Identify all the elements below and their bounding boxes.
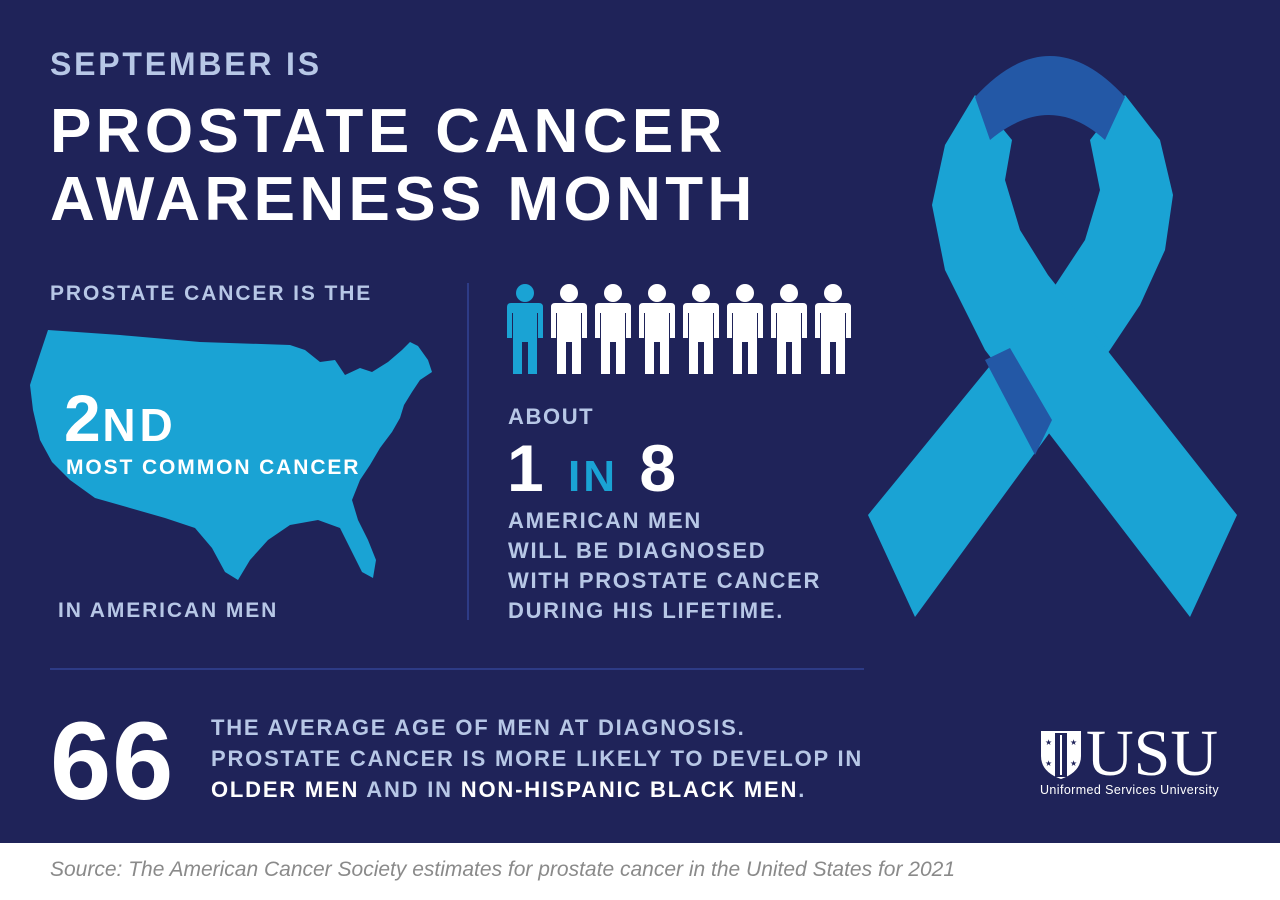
icon row: people (507, 284, 851, 374)
title: AWARENESS MONTH (50, 165, 757, 234)
shield: ★ (1045, 759, 1052, 768)
heading: PROSTATE CANCER IS THE (50, 282, 372, 305)
text block: AMERICAN MEN (508, 508, 702, 533)
text: about: ABOUT (508, 404, 594, 429)
logo: USU: USU (1086, 717, 1218, 790)
text: most common cancer: MOST COMMON CANCER (66, 456, 360, 479)
divider vertical (467, 283, 469, 620)
text: average age: THE AVERAGE AGE OF MEN AT DIAGNOSIS. (211, 715, 746, 740)
title (50, 97, 757, 234)
text block (508, 508, 821, 623)
ribbon (868, 56, 1237, 617)
logo: USU (1040, 717, 1219, 797)
subtitle: SEPTEMBER IS (50, 46, 322, 82)
panel: second most common (30, 282, 432, 622)
shield: ★ (1070, 738, 1077, 747)
text: average age: OLDER MEN AND IN NON-HISPANIC BLACK MEN. (211, 777, 806, 802)
source footer: Source: The American Cancer Society estimates for prostate cancer in the United States for 2021 (50, 858, 955, 881)
big stat 1 in 8: 1 IN 8 (507, 431, 679, 505)
shield: ★ (1070, 759, 1077, 768)
strand: loop right to bottom-left tail (868, 95, 1173, 617)
text block: WILL BE DIAGNOSED (508, 538, 766, 563)
title: PROSTATE CANCER (50, 97, 727, 166)
shield: ★ (1045, 738, 1052, 747)
text: average age: PROSTATE CANCER IS MORE LIKELY TO DEVELOP IN (211, 746, 863, 771)
text block: WITH PROSTATE CANCER (508, 568, 821, 593)
map: USA (30, 330, 432, 580)
logo: USU: Uniformed Services University (1040, 783, 1219, 797)
text: average age (211, 715, 863, 802)
panel: 1 in 8 (507, 284, 851, 623)
top arc (975, 56, 1125, 140)
strand: loop left to bottom-right tail (932, 95, 1237, 617)
divider horizontal (50, 668, 864, 670)
big number 2ND: 2ND (64, 381, 177, 455)
crossing shade (985, 348, 1052, 455)
shield (1041, 731, 1081, 779)
stat: 66: 66 (50, 700, 174, 823)
text: in american men: IN AMERICAN MEN (58, 599, 278, 622)
text block: DURING HIS LIFETIME. (508, 598, 784, 623)
